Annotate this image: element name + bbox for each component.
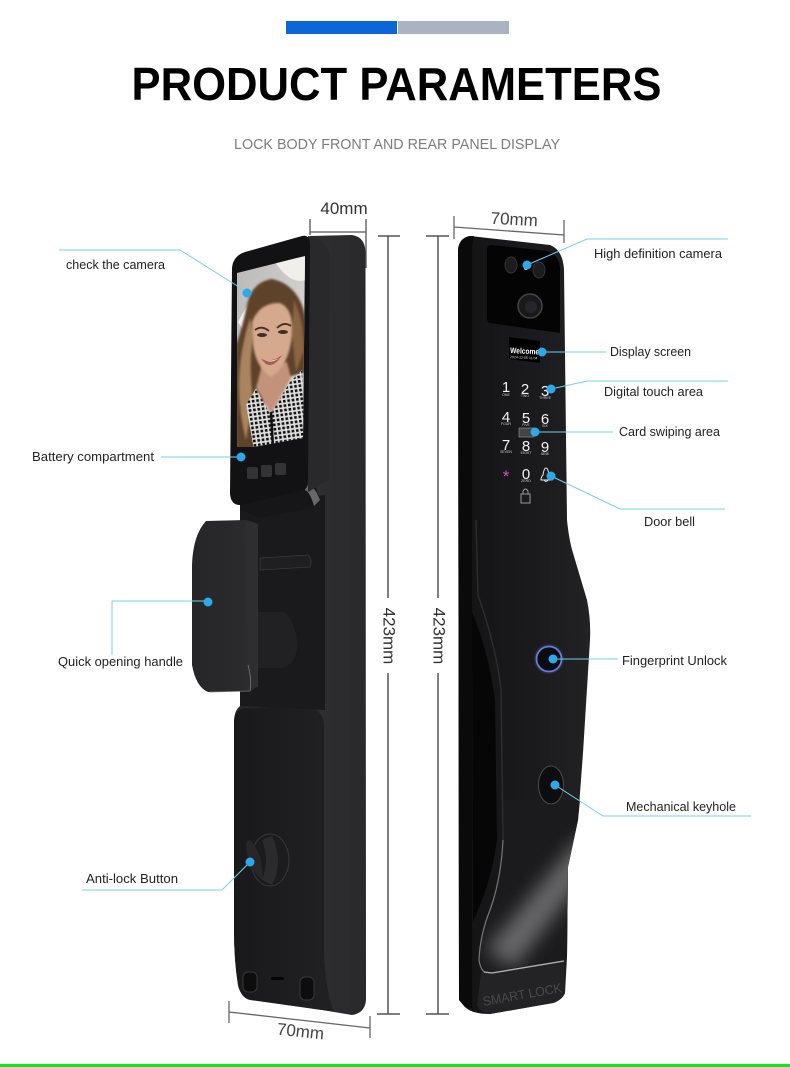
callout: anti-lock button	[82, 858, 254, 890]
callout: display screen	[538, 344, 691, 359]
lock front face, lower	[234, 706, 334, 1011]
callout: door bell	[546, 472, 725, 529]
callout: quick opening handle	[58, 598, 212, 669]
keypad	[500, 379, 552, 486]
top accent bar	[286, 21, 509, 34]
display screen	[509, 337, 540, 363]
smart lock engraving: SMART LOCK	[482, 980, 563, 1009]
handle recess	[258, 612, 297, 668]
base highlight	[484, 961, 564, 973]
display screen: 2024-12-05 11:04	[510, 355, 538, 360]
callout: battery compartment: Battery compartment	[32, 449, 154, 464]
keypad: EIGHT	[521, 451, 532, 455]
keypad: 3	[541, 383, 549, 400]
keypad: NINE	[541, 452, 550, 456]
flip hinge	[240, 480, 320, 518]
callout: check the camera: check the camera	[66, 257, 166, 272]
lock neck	[240, 495, 325, 710]
lower sheen plate	[480, 800, 580, 971]
screen buttons	[247, 463, 286, 479]
keypad: TWO	[521, 394, 529, 398]
keypad: FOUR	[501, 422, 511, 426]
quick opening handle	[192, 520, 258, 692]
keypad: SEVEN	[500, 450, 512, 454]
mechanical keyhole cover	[538, 766, 564, 804]
keypad: 7	[502, 437, 510, 454]
dimension: 423mm rear	[426, 236, 449, 1014]
fingerprint sensor	[534, 644, 564, 674]
callout: fingerprint unlock	[548, 653, 727, 668]
callout: door bell: Door bell	[644, 514, 695, 529]
subtitle: LOCK BODY FRONT AND REAR PANEL DISPLAY	[234, 136, 560, 153]
rear lock panel	[458, 236, 596, 1014]
lock side body	[234, 235, 366, 1015]
dimension: 70mm rear: 70mm	[490, 209, 538, 230]
channel edge	[476, 520, 503, 840]
keypad: 8	[522, 438, 530, 455]
bell icon	[541, 468, 552, 482]
callout: display screen: Display screen	[610, 344, 691, 359]
screen module	[230, 236, 310, 505]
keypad: *	[503, 467, 510, 486]
callout: high definition camera: High definition camera	[594, 246, 723, 261]
dimension: 70mm rear	[454, 209, 564, 243]
callout: check the camera	[59, 250, 252, 298]
callout: fingerprint unlock: Fingerprint Unlock	[622, 653, 727, 668]
keypad: SIX	[542, 424, 548, 428]
keypad: ZERO	[521, 479, 531, 483]
portrait face	[252, 303, 292, 377]
dimension: 40mm: 40mm	[320, 199, 368, 218]
display screen: Welcome	[510, 346, 540, 357]
plate highlight	[479, 840, 503, 974]
callout: mechanical keyhole: Mechanical keyhole	[626, 799, 736, 814]
padlock icon	[521, 489, 530, 503]
panel silhouette	[458, 236, 590, 1014]
side channel	[472, 612, 497, 922]
bottom screws	[243, 972, 314, 1000]
keypad: 5	[522, 410, 530, 427]
portrait neck and chest	[256, 362, 291, 414]
bottom green line	[0, 1064, 790, 1067]
dimension: 40mm	[310, 199, 368, 268]
callout: anti-lock button: Anti-lock Button	[86, 871, 178, 886]
video screen	[235, 254, 307, 450]
dimension: 70mm front	[229, 1001, 370, 1043]
front lock: panel with screen and handle	[192, 235, 366, 1015]
keypad: 2	[521, 381, 529, 398]
title: PRODUCT PARAMETERS	[132, 58, 662, 110]
keypad: ONE	[502, 393, 510, 397]
dimension: 423mm rear: 423mm	[430, 608, 449, 664]
callout: high definition camera	[522, 239, 728, 270]
callout: quick opening handle: Quick opening handle	[58, 654, 183, 669]
callout: card swiping area	[530, 424, 721, 439]
slider	[260, 555, 311, 570]
dimension: 423mm front	[377, 236, 400, 1014]
keypad: FIVE	[522, 423, 531, 427]
callout: battery compartment	[32, 449, 246, 464]
dimension: 70mm front: 70mm	[276, 1020, 325, 1043]
anti-lock knob	[246, 834, 289, 886]
callout: digital touch area: Digital touch area	[604, 384, 704, 399]
smart lock base	[477, 960, 565, 1014]
keypad: 9	[541, 439, 549, 456]
keypad: 0	[522, 466, 530, 483]
callout: card swiping area: Card swiping area	[619, 424, 721, 439]
camera lenses	[505, 257, 545, 318]
keypad: 4	[502, 409, 510, 426]
camera window	[487, 245, 560, 333]
card swiping mark	[519, 428, 534, 437]
keypad: 1	[502, 379, 510, 396]
callout: mechanical keyhole	[550, 780, 751, 816]
portrait jacket	[246, 370, 306, 450]
portrait hair	[236, 279, 306, 450]
screen module side	[308, 236, 330, 492]
keypad: THREE	[539, 396, 552, 400]
dimension: 423mm front: 423mm	[380, 608, 399, 664]
keypad: 6	[541, 411, 549, 428]
callout: digital touch area	[546, 381, 728, 399]
